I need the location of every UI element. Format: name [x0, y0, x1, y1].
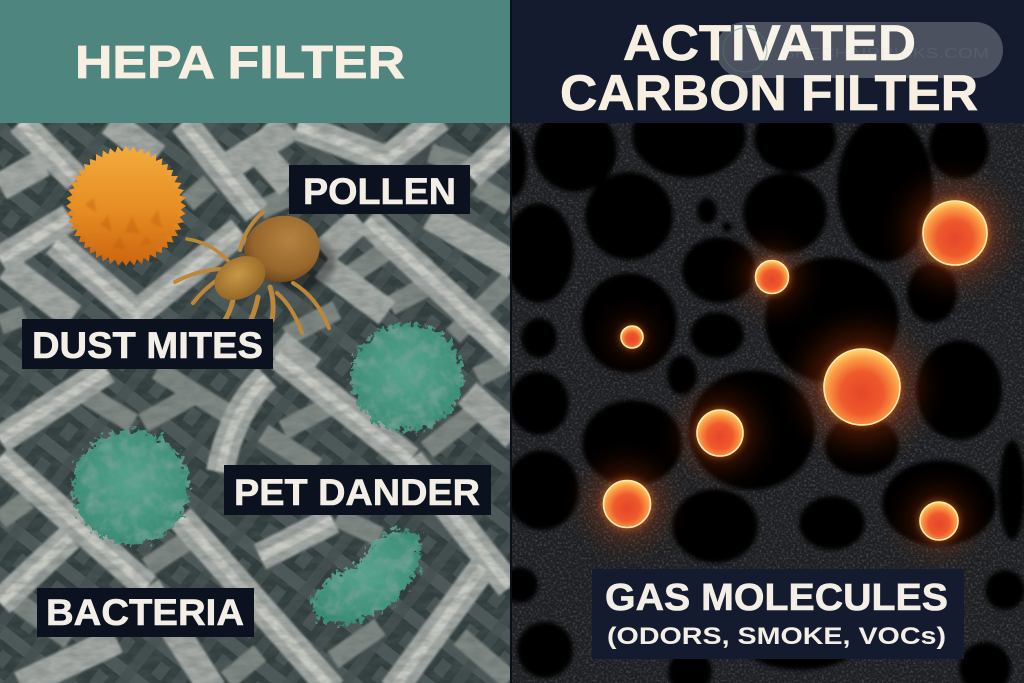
title: HEPA FILTER: HEPA FILTER	[75, 36, 405, 88]
watermark pill	[716, 22, 1003, 78]
title: ACTIVATED CARBON FILTER: CARBON FILTER	[560, 65, 978, 121]
title: ACTIVATED CARBON FILTER	[560, 15, 978, 121]
woven strands	[0, 118, 515, 683]
icon: bacteria cluster	[73, 430, 189, 544]
icon: dust mite	[175, 209, 336, 333]
label: DUST MITES: DUST MITES	[32, 325, 263, 366]
icon: pet dander particle	[351, 323, 463, 431]
panel: carbon pores	[497, 92, 1024, 683]
panel: HEPA filter header	[0, 0, 510, 123]
label: PET DANDER: PET DANDER	[234, 472, 480, 513]
icon: elongated bacterium	[310, 528, 421, 625]
icon: pollen grain	[59, 139, 193, 273]
panel: HEPA fibre mesh	[0, 118, 515, 683]
panel: activated carbon header	[510, 0, 1024, 123]
label: BACTERIA: BACTERIA	[46, 592, 244, 633]
icon: gas molecule orbs	[589, 183, 1005, 551]
pores	[497, 92, 1024, 683]
label: GAS MOLECULES: GAS MOLECULES	[605, 577, 948, 619]
watermark pill: SPECHAIRPICKS.COM	[782, 45, 989, 62]
label: GAS MOLECULES: (ODORS, SMOKE, VOCs)	[607, 623, 946, 650]
label: POLLEN	[289, 165, 470, 214]
title: ACTIVATED CARBON FILTER: ACTIVATED	[623, 15, 916, 71]
label: POLLEN: POLLEN	[303, 171, 456, 212]
divider	[510, 0, 512, 683]
label: GAS MOLECULES	[592, 569, 964, 659]
